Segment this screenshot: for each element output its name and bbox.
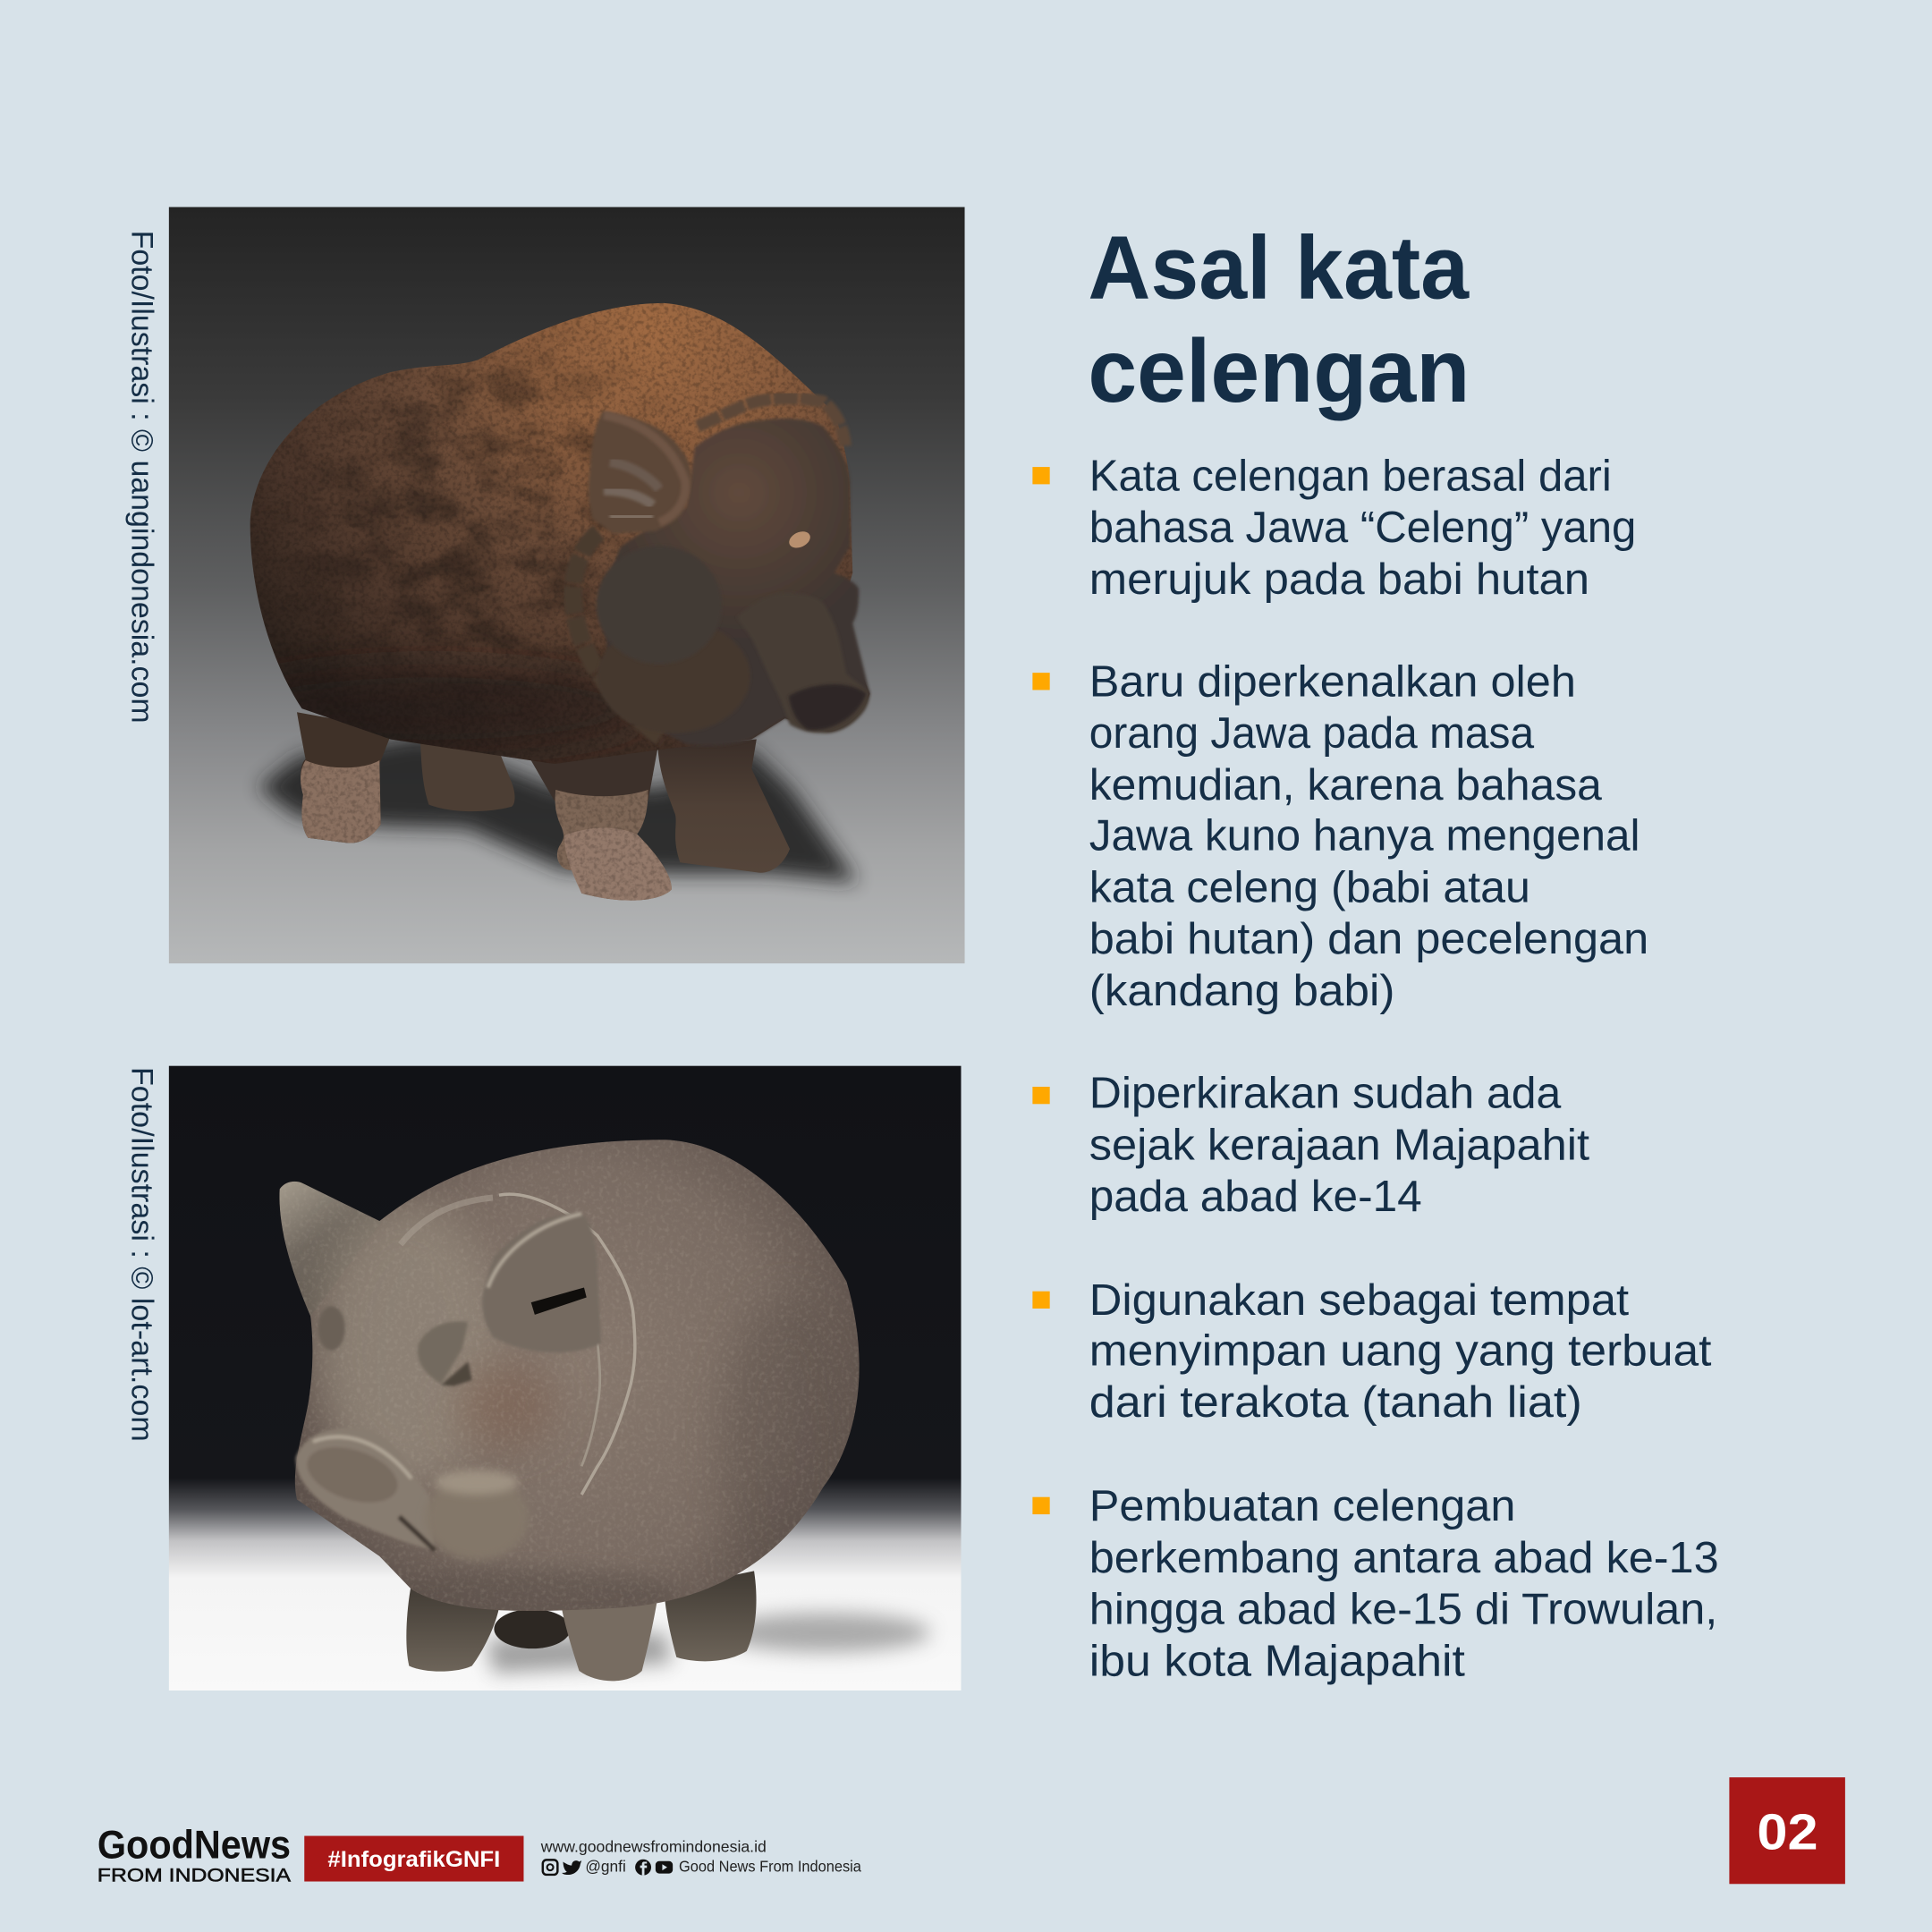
logo: GoodNews From Indonesia [97,1823,292,1886]
bullet 2: Baru diperkenalkan oleh [1089,656,1576,706]
bullet 3: Diperkirakan sudah ada [1089,1067,1562,1117]
website and social handles: @gnfi [585,1857,626,1875]
bullet 3 [1032,1067,1589,1221]
title: Asal kata [1088,217,1470,318]
body [277,1133,869,1626]
bullet 2: (kandang babi) [1089,965,1394,1015]
bullet 4: Digunakan sebagai tempat [1089,1275,1629,1325]
bullet 4: menyimpan uang yang terbuat [1089,1325,1712,1375]
bullet 2: kata celeng (babi atau [1089,861,1530,911]
floor shadow [487,1613,930,1674]
bullet 5: Pembuatan celengan [1089,1480,1515,1530]
eye mark [789,531,810,547]
bullet 1: bahasa Jawa “Celeng” yang [1089,502,1636,552]
incised lines [499,1194,635,1495]
bullet 5: berkembang antara abad ke-13 [1089,1532,1719,1582]
photo credit: bottom image: Foto/Ilustrasi : © lot-art.com [124,1067,158,1442]
bullet 2: Jawa kuno hanya mengenal [1089,810,1640,860]
bullet 5: ibu kota Majapahit [1089,1635,1465,1685]
right ear with coin slot [482,1213,601,1352]
title [1088,217,1470,421]
snout [748,603,871,735]
icon: youtube [656,1861,673,1874]
logo: GoodNews From Indonesia: FROM INDONESIA [97,1865,292,1886]
bullet 1: merujuk pada babi hutan [1089,554,1589,604]
bullet 3: sejak kerajaan Majapahit [1089,1119,1589,1169]
left eye [318,1306,345,1351]
ear [589,411,691,533]
legs [296,712,790,905]
left collar [573,532,664,740]
bullet 5: hingga abad ke-15 di Trowulan, [1089,1584,1717,1634]
logo: GoodNews From Indonesia: GoodNews [97,1823,291,1867]
page number: 02 [1757,1804,1818,1860]
photo: brown terracotta boar [169,207,965,963]
bullet 2: kemudian, karena bahasa [1089,759,1602,809]
photo credit: top image: Foto/Ilustrasi : © uangindonesia.com [124,231,158,724]
face tone [314,1201,499,1485]
title: celengan [1088,321,1470,421]
website and social handles [540,1837,861,1876]
cheek [596,547,716,644]
cheek [425,1470,529,1560]
top collar [698,398,845,446]
left ear [279,1182,377,1307]
head [573,398,870,746]
icon: instagram [543,1860,557,1875]
bullet 4: dari terakota (tanah liat) [1089,1377,1582,1427]
page number [1729,1777,1845,1884]
photo: grey clay piggy bank [169,1066,961,1690]
bullet 2: orang Jawa pada masa [1089,708,1534,758]
bullet 5 [1032,1480,1719,1685]
floor shadow [258,735,858,882]
website and social handles: www.goodnewsfromindonesia.id [540,1837,767,1855]
bullet 1: Kata celengan berasal dari [1089,450,1612,500]
bullet 1 [1032,450,1636,604]
brow bump [418,1321,472,1386]
website and social handles: Good News From Indonesia [679,1857,861,1875]
hashtag badge: #InfografikGNFI [327,1848,500,1872]
lower jowl [600,652,748,732]
bullet 2: babi hutan) dan pecelengan [1089,913,1648,963]
hashtag badge [304,1836,523,1882]
body [250,302,869,764]
snout [296,1428,435,1550]
icon: twitter [562,1860,581,1875]
bullet 3: pada abad ke-14 [1089,1171,1422,1221]
legs [406,1571,757,1681]
icon: facebook [635,1860,651,1876]
head mass [601,419,870,746]
bullet 4 [1032,1275,1712,1427]
bullet 2 [1032,656,1648,1015]
